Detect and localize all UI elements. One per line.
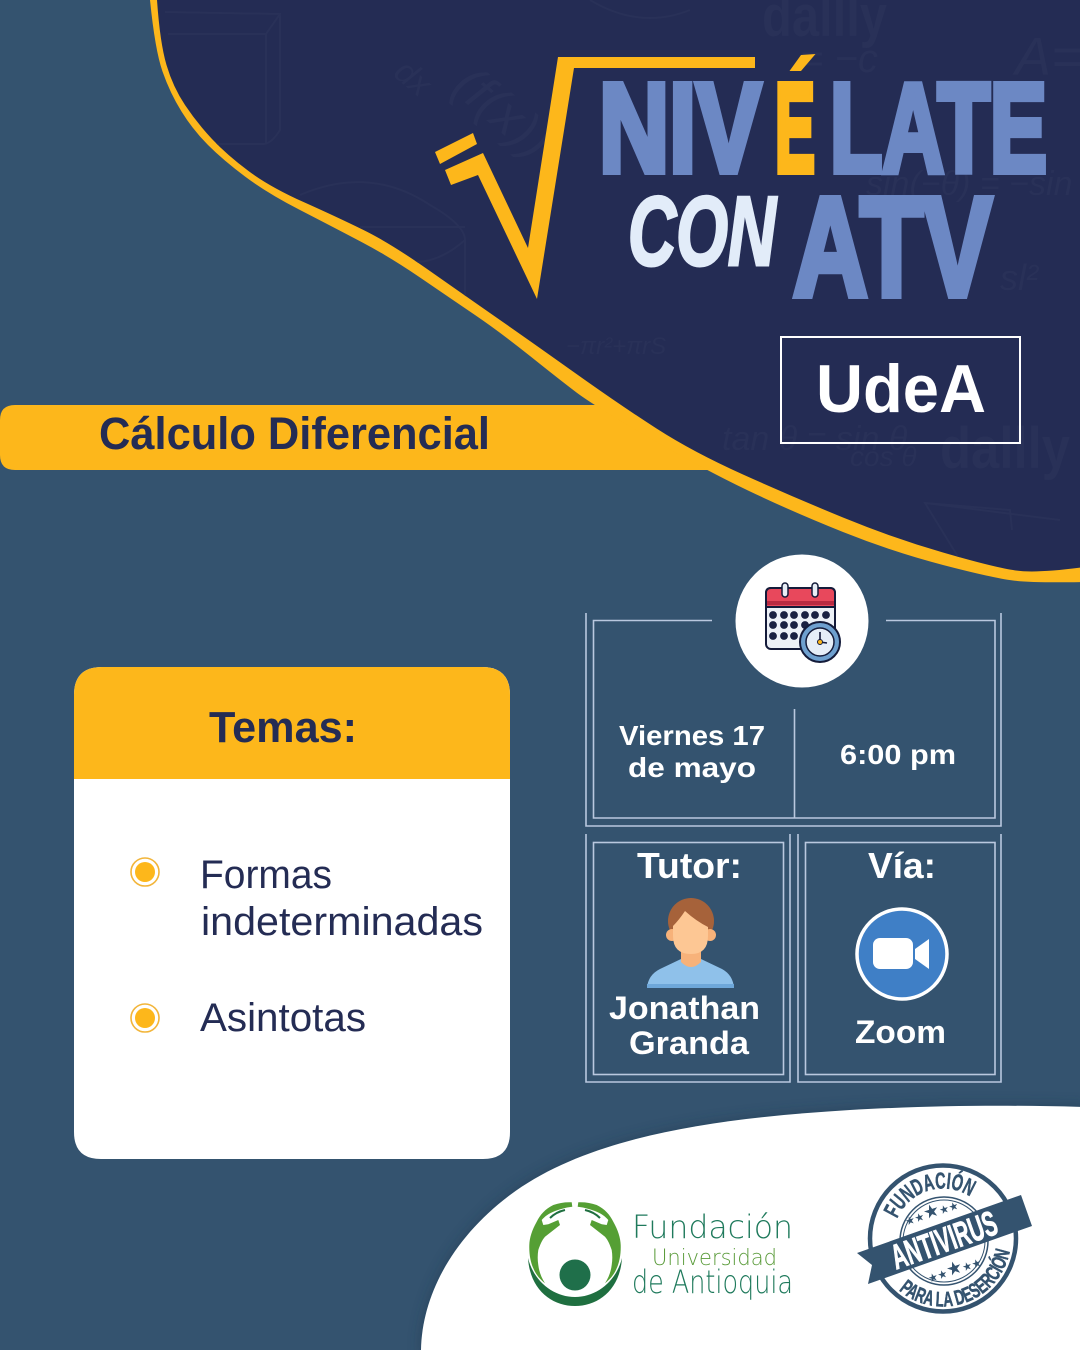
heading: Tutor: Tutor:	[637, 845, 742, 886]
text: foundation name: Fundación	[632, 1208, 793, 1246]
panel: tutor	[586, 834, 790, 1082]
heading: Temas: Temas:	[209, 703, 357, 752]
text: Zoom: Zoom	[855, 1014, 946, 1050]
text: tutor name: Jonathan	[609, 990, 760, 1026]
faint math background: (f(x))	[442, 55, 564, 170]
faint math background: dx	[387, 52, 440, 105]
icon: calendar and clock	[736, 554, 868, 688]
panel: via	[798, 834, 1001, 1082]
icon: person	[647, 898, 734, 988]
badge: UdeA: UdeA	[816, 351, 986, 427]
title: Nivélate con ATV: ATV	[793, 168, 992, 326]
text: stars top: ★★★★★	[902, 1193, 961, 1229]
title: Nivélate con ATV: É	[775, 58, 815, 198]
faint math background: sin(−θ) = −sin	[866, 165, 1072, 203]
text: hora: 6:00 pm	[840, 739, 956, 770]
text: foundation name: de Antioquia	[632, 1263, 793, 1301]
bullet: Formas indeterminadas: indeterminadas	[201, 900, 483, 944]
banner: Cálculo Diferencial: Cálculo Diferencial	[99, 408, 490, 459]
footer: white wave panel	[421, 1106, 1080, 1350]
faint math background: tan θ = sin θ	[722, 420, 908, 458]
faint math background: cos θ	[850, 441, 917, 472]
stamp: Fundación Antivirus	[857, 1163, 1032, 1314]
text: tutor name: Granda	[629, 1025, 749, 1061]
text: foundation name: Universidad	[652, 1246, 777, 1271]
faint math background	[216, 143, 960, 558]
logo: Fundación Universidad de Antioquia	[528, 1202, 793, 1306]
title: Nivélate con ATV	[602, 54, 1046, 299]
faint math background: −πr²+πrS	[566, 333, 666, 360]
heading: Vía: Vía:	[868, 845, 936, 886]
faint math background: = −c	[800, 37, 878, 81]
bullet: Asintotas: Asintotas	[200, 996, 366, 1040]
banner: Cálculo Diferencial	[0, 405, 712, 470]
icon: foundation emblem	[528, 1202, 622, 1306]
icon: zoom camera	[857, 909, 947, 999]
text: foundation name	[632, 1208, 793, 1301]
panel: fecha y hora	[586, 613, 1001, 826]
text: tutor name	[609, 990, 760, 1061]
ribbon: Antivirus: ANTIVIRUS	[886, 1204, 1003, 1277]
panel: temas	[74, 667, 510, 1159]
title: Nivélate con ATV: CON	[628, 176, 778, 286]
faint math background: sl²	[1000, 257, 1040, 298]
badge: UdeA	[781, 337, 1020, 443]
text: stamp top: FUNDACIÓN	[883, 1170, 977, 1218]
text: stamp bottom: PARA LA DESERCIÓN	[899, 1248, 1010, 1307]
header: navy wave panel	[150, 0, 1080, 582]
text: fecha: de mayo	[628, 752, 756, 783]
title: Nivélate con ATV: NIV	[599, 58, 761, 198]
text: stars bottom: ★★★★★	[925, 1250, 984, 1286]
bullet: Formas indeterminadas: Formas	[200, 853, 332, 897]
text: fecha: Viernes 17	[619, 720, 765, 751]
ribbon: Antivirus	[857, 1195, 1032, 1284]
icon: square root symbol	[435, 57, 755, 299]
bullet: Formas indeterminadas	[131, 853, 483, 944]
text: fecha	[619, 720, 765, 783]
